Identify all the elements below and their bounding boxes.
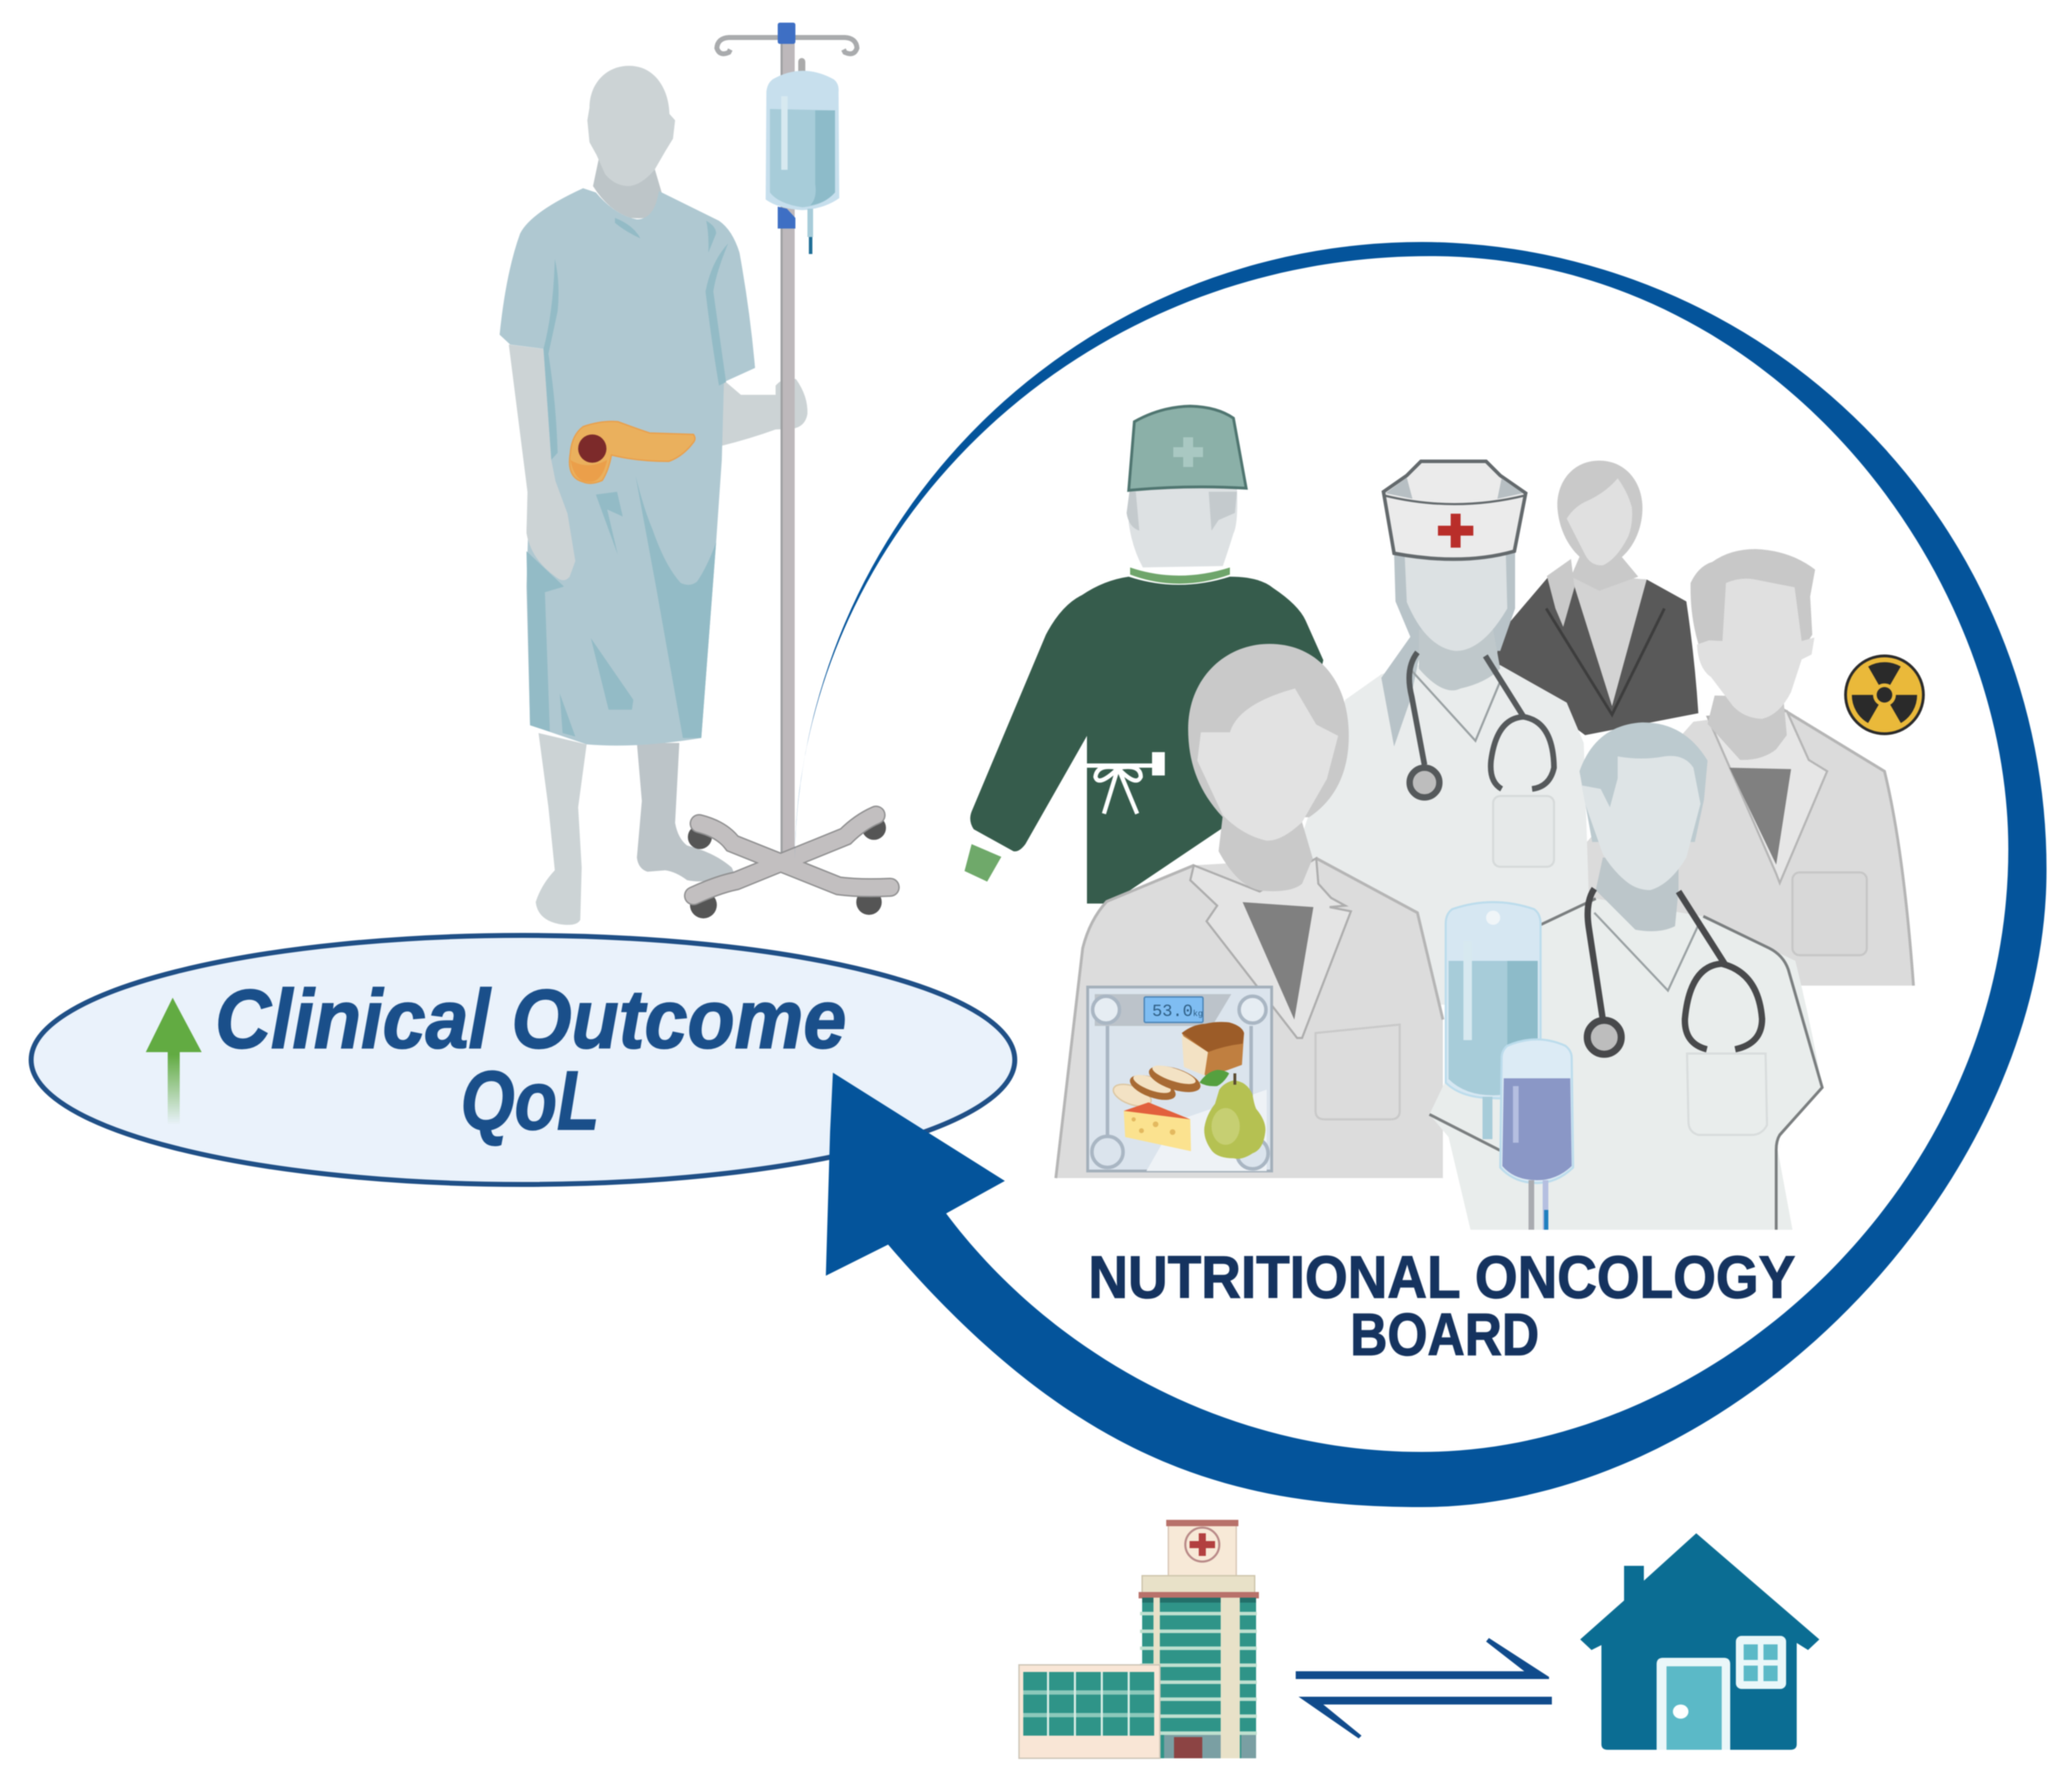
front doctor coat xyxy=(1056,858,1443,1178)
bread loaf xyxy=(1110,1022,1244,1111)
stand wheels xyxy=(688,816,886,918)
hospital tower xyxy=(1140,1598,1257,1758)
patient left arm xyxy=(509,345,575,580)
nurse cap xyxy=(1383,461,1526,559)
gown cuff xyxy=(965,844,1001,882)
green up arrow xyxy=(146,998,202,1125)
board title xyxy=(1088,1244,1795,1368)
radiation symbol xyxy=(1844,654,1925,735)
scale display: 53.0kg xyxy=(1152,1003,1203,1022)
surgeon collar xyxy=(1130,567,1230,584)
title line two: BOARD xyxy=(1350,1301,1539,1368)
right doctor neck xyxy=(1708,696,1787,760)
ellipse shape xyxy=(31,935,1015,1184)
front right doctor hair xyxy=(1579,722,1708,842)
small purple IV bag xyxy=(1500,1039,1573,1230)
patient right arm holding pole xyxy=(722,378,807,446)
surgeon green gown xyxy=(970,577,1323,904)
front doctor lapels xyxy=(1190,858,1351,1038)
front left doctor xyxy=(1056,644,1443,1178)
front doctor hair xyxy=(1188,644,1349,817)
QoL heading: QoL xyxy=(461,1054,599,1148)
IV bag on pole xyxy=(766,58,839,254)
front right doctor neck xyxy=(1596,858,1679,931)
nurse neck xyxy=(1419,630,1500,691)
front doctor pocket xyxy=(1316,1025,1400,1119)
pear xyxy=(1199,1070,1265,1159)
right doctor pocket xyxy=(1792,872,1867,955)
clinical outcome ellipse xyxy=(31,935,1015,1184)
patient head xyxy=(587,66,675,186)
hospital roof xyxy=(1142,1576,1255,1593)
house icon xyxy=(1580,1533,1819,1750)
title line one: NUTRITIONAL ONCOLOGY xyxy=(1088,1244,1795,1310)
nurse hair and ponytail xyxy=(1381,552,1515,746)
scale panel xyxy=(1088,987,1272,1171)
woman face xyxy=(1567,478,1632,565)
cheese xyxy=(1124,1102,1191,1151)
right doctor collar and shirt xyxy=(1708,711,1827,883)
clinical outcome heading: Clinical Outcome xyxy=(215,973,846,1066)
IV pole and stand xyxy=(688,23,890,918)
nurse xyxy=(1302,461,1589,1005)
woman shirt xyxy=(1570,573,1647,706)
patient neck xyxy=(593,159,662,218)
big circular arrow xyxy=(795,242,2047,1507)
front right doctor pocket xyxy=(1687,1054,1767,1135)
arrow to home xyxy=(1296,1638,1549,1679)
woman head xyxy=(1558,461,1642,566)
gown tie bow xyxy=(1087,766,1152,814)
nutritional oncology board team xyxy=(965,406,1925,1230)
front right stethoscope xyxy=(1587,889,1762,1054)
right doctor with coat xyxy=(1565,549,1913,986)
front right doctor face xyxy=(1582,756,1700,890)
right doctor hair xyxy=(1691,549,1815,658)
house body xyxy=(1580,1533,1819,1750)
front doctor shirt xyxy=(1243,902,1313,1020)
scale feet xyxy=(1092,996,1268,1169)
house door xyxy=(1657,1658,1730,1750)
woman neck and ponytail xyxy=(1571,552,1638,591)
front right doctor xyxy=(1429,722,1822,1230)
patient left leg xyxy=(536,733,587,925)
hospital icon xyxy=(1019,1520,1259,1758)
IV pole shaft xyxy=(781,28,795,862)
pole clamps xyxy=(778,23,795,229)
IV pole top hooks xyxy=(717,38,857,54)
patient gown xyxy=(500,188,755,746)
scale with food xyxy=(1088,987,1272,1171)
nurse face xyxy=(1405,555,1507,651)
nurse pocket xyxy=(1493,796,1554,867)
patient hand over gown xyxy=(526,460,575,580)
front doctor neck xyxy=(1219,815,1313,892)
scale display xyxy=(1144,997,1203,1022)
patient figure xyxy=(500,66,807,925)
house window xyxy=(1736,1636,1786,1689)
arrow to hospital xyxy=(1299,1697,1552,1738)
two way arrows xyxy=(1296,1638,1552,1738)
front right doctor scrubs xyxy=(1429,899,1822,1230)
stand base cross xyxy=(693,815,890,896)
nurse stethoscope xyxy=(1409,652,1554,797)
woman jacket xyxy=(1497,576,1698,735)
gown folds xyxy=(526,218,728,738)
surgeon head xyxy=(1129,488,1237,567)
hospital left wing xyxy=(1019,1665,1160,1758)
pancreas with tumor xyxy=(570,422,695,483)
woman in dark jacket xyxy=(1497,461,1698,735)
hospital cross badge xyxy=(1185,1528,1219,1562)
surgeon xyxy=(965,406,1323,904)
hospital sign tower xyxy=(1168,1521,1236,1576)
right doctor face xyxy=(1697,579,1814,719)
surgical cap xyxy=(1129,406,1246,490)
patient right leg xyxy=(637,743,735,882)
right doctor coat xyxy=(1565,710,1913,986)
front doctor face xyxy=(1197,688,1338,841)
large IV bag xyxy=(1446,902,1541,1139)
nurse scrubs xyxy=(1302,665,1589,1005)
